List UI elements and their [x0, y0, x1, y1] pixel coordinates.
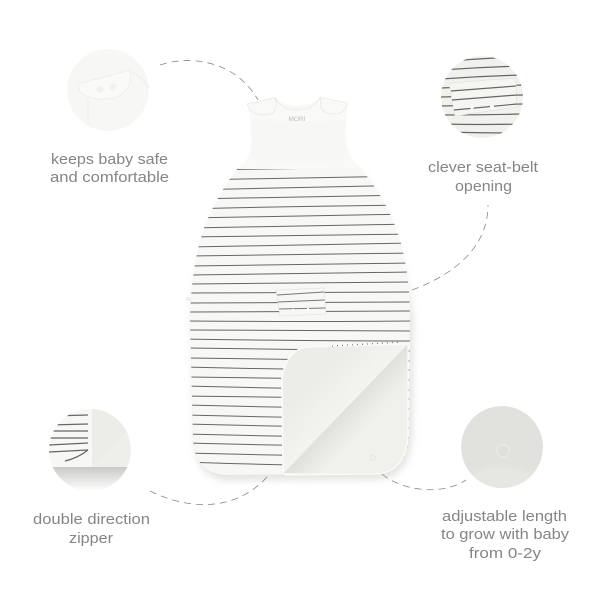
label: keeps baby safe	[51, 151, 168, 168]
icon: striped tab photo	[441, 56, 523, 138]
label: adjustable length	[442, 508, 567, 525]
icon: shoulder snap photo	[67, 49, 154, 131]
garment shadow	[192, 172, 413, 480]
callout: adjustable length	[441, 406, 570, 562]
brand label: MORI	[288, 117, 306, 123]
label	[441, 508, 570, 562]
infographic canvas	[34, 49, 569, 561]
label: and comfortable	[50, 169, 169, 186]
icon: zipper corner photo	[49, 409, 131, 491]
striped body	[185, 167, 415, 475]
callout: seat-belt opening	[428, 56, 539, 195]
left shoulder tab	[247, 98, 276, 115]
right shoulder tab	[320, 97, 347, 114]
label	[428, 159, 539, 195]
label	[50, 151, 169, 186]
connector: snap to length callout	[382, 474, 466, 490]
icon: snap button photo	[461, 406, 543, 490]
seat-belt tab	[276, 288, 326, 316]
label	[33, 511, 150, 547]
folded flap	[282, 342, 408, 475]
callout: double direction zipper	[33, 409, 150, 547]
callout: keeps baby safe	[50, 49, 169, 186]
label: to grow with baby	[441, 526, 570, 543]
label: opening	[455, 178, 512, 195]
connector: zipper to zipper callout	[150, 476, 268, 505]
label: zipper	[69, 530, 113, 547]
side loop	[186, 297, 191, 301]
connector: shoulder to safety callout	[160, 61, 258, 100]
label: double direction	[33, 511, 150, 528]
sleep sack garment	[185, 97, 415, 480]
label: from 0-2y	[469, 545, 542, 562]
top yoke	[238, 97, 362, 169]
connector: tab to seat-belt callout	[412, 205, 488, 290]
label: clever seat-belt	[428, 159, 539, 176]
